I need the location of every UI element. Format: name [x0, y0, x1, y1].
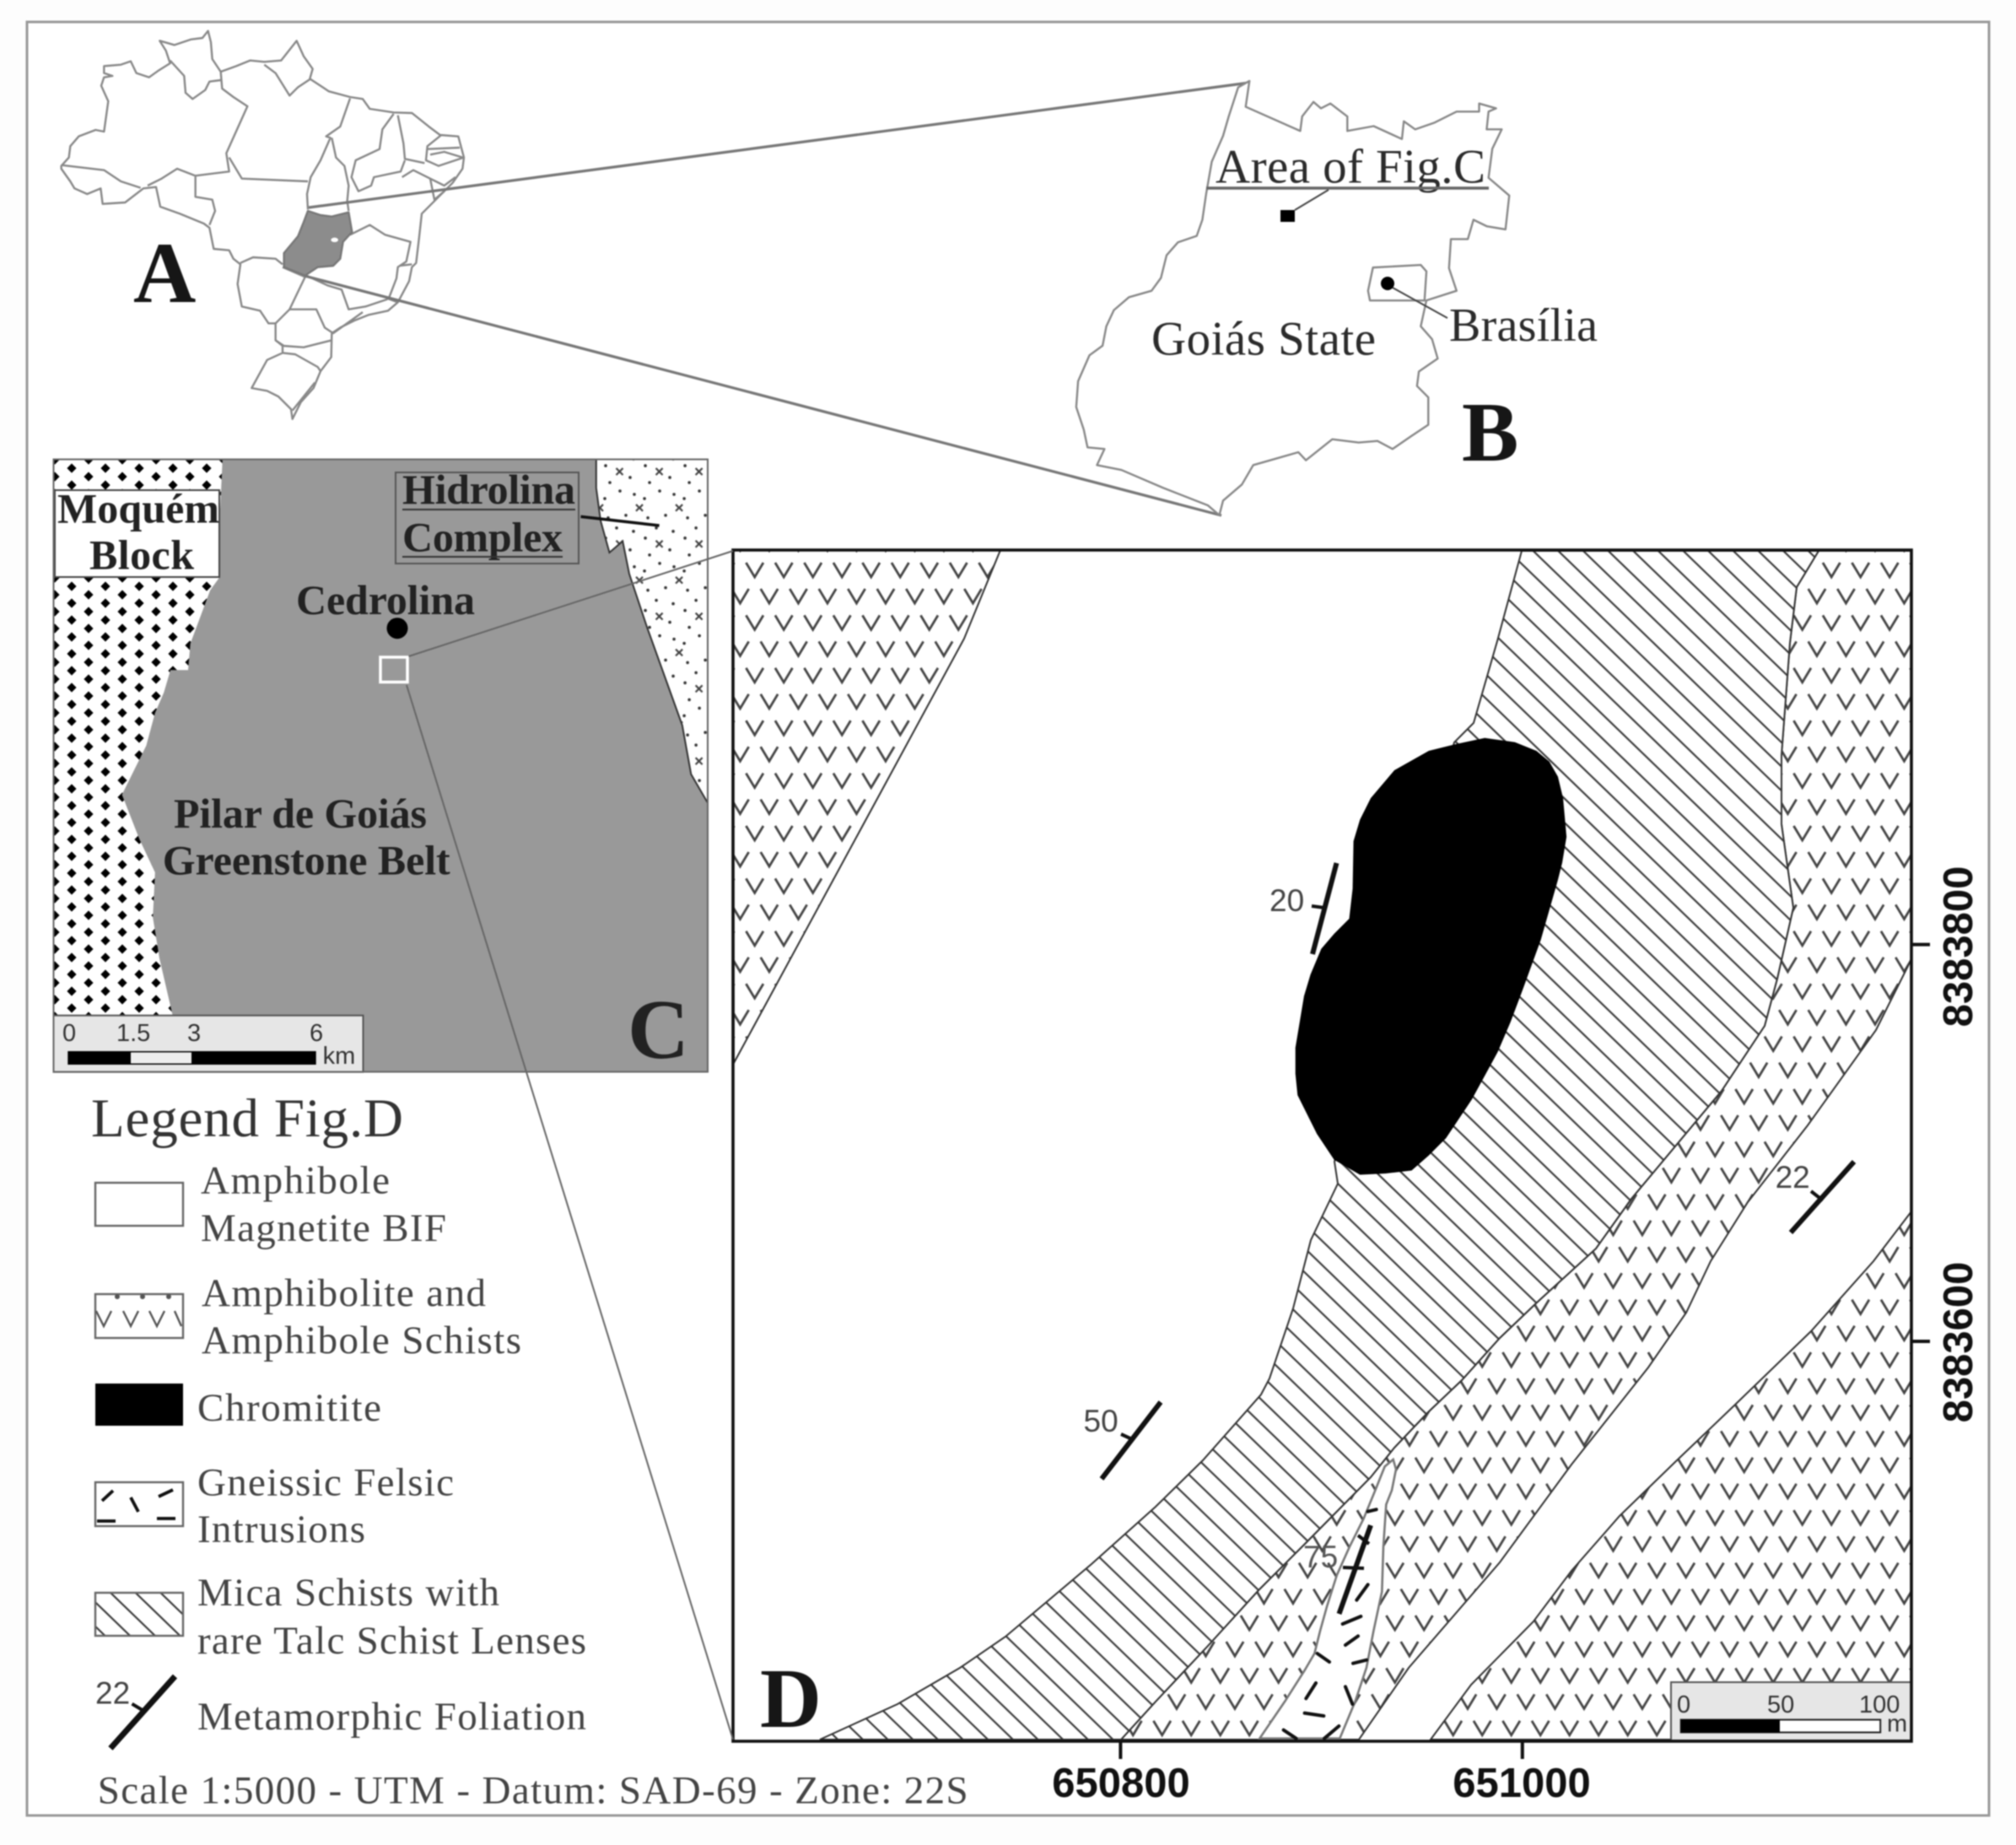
Brasília label: Brasília [1449, 299, 1598, 352]
chromitite body [1296, 738, 1566, 1175]
scale bar C [54, 1016, 363, 1072]
legend: Amphibole Magnetite BIF: Magnetite BIF [201, 1206, 446, 1250]
legend: Amphibolite and Amphibole Schists [95, 1271, 521, 1362]
label B: B [1462, 385, 1518, 479]
legend title: Legend Fig.D [91, 1088, 403, 1149]
scale bar C: 3 [187, 1020, 201, 1047]
foliation 22 [1776, 1160, 1854, 1233]
legend: Amphibolite and Amphibole Schists: Amphibole Schists [202, 1319, 521, 1362]
amphibolite lower right [1431, 1211, 1911, 1740]
Pilar de Goiás label: Pilar de Goiás [174, 790, 427, 837]
panel C: regional geology [54, 459, 708, 1076]
panel A: map of Brazil [62, 31, 464, 419]
Hidrolina leader [580, 516, 660, 526]
felsic dashes [1284, 1509, 1377, 1739]
scale and datum note: Scale 1:5000 - UTM - Datum: SAD-69 - Zone: 22S [98, 1768, 968, 1812]
Brazil outline [62, 31, 464, 419]
zoom lines A to B [305, 83, 1249, 515]
foliation 75: 75 [1303, 1540, 1338, 1574]
legend: Chromitite [95, 1384, 381, 1430]
scale bar D: 0 [1677, 1691, 1690, 1718]
Moquém Block terrain [54, 459, 223, 1016]
legend: Chromitite: Chromitite [197, 1386, 381, 1430]
state borders [62, 61, 464, 411]
Hidrolina Complex label [396, 466, 579, 564]
Greenstone Belt label: Greenstone Belt [163, 837, 450, 884]
foliation 50 [1083, 1402, 1161, 1479]
scale bar C: 6 [310, 1020, 323, 1047]
Goiás State label: Goiás State [1151, 312, 1376, 366]
Moquém Block label: Block [89, 531, 194, 578]
Hidrolina Complex label: Complex [402, 514, 563, 561]
legend: Mica Schists with rare Talc Schist Lenses: Mica Schists with [197, 1571, 499, 1615]
Hidrolina Complex label: Hidrolina [402, 466, 575, 513]
scale bar C: 1.5 [116, 1020, 150, 1047]
zoom lines C to D [407, 551, 733, 1740]
state outline and Federal District [1076, 81, 1509, 515]
Area of Fig.C label: Area of Fig.C [1216, 140, 1485, 194]
axis label 651000: 651000 [1453, 1761, 1591, 1806]
panel D: detailed geological map [733, 550, 1911, 1745]
amphibolite central band [1121, 551, 1911, 1740]
axis label 8383600: 8383600 [1936, 1262, 1981, 1422]
mica schist band [820, 551, 1819, 1740]
Moquém Block label: Moquém [57, 485, 219, 532]
legend: Amphibole Magnetite BIF: Amphibole [201, 1159, 390, 1203]
legend: Gneissic Felsic Intrusions: Gneissic Felsic [197, 1461, 454, 1505]
Federal District [331, 238, 338, 242]
label A: A [133, 225, 196, 321]
scale bar D: 50 [1767, 1691, 1794, 1718]
Cedrolina point [386, 618, 408, 639]
legend: Gneissic Felsic Intrusions: Intrusions [197, 1508, 365, 1551]
foliation 75 [1303, 1525, 1371, 1614]
area underline [1206, 186, 1489, 190]
Cedrolina label: Cedrolina [296, 576, 475, 623]
legend: Mica Schists with rare Talc Schist Lenses [95, 1571, 586, 1663]
foliation 22: 22 [1776, 1160, 1810, 1195]
axis tick marks [1120, 945, 1930, 1759]
legend [91, 1088, 586, 1748]
gneissic felsic intrusion lens [1259, 1459, 1396, 1739]
scale bar C: km [323, 1043, 355, 1070]
Hidrolina Complex terrain [596, 459, 708, 803]
legend: Metamorphic Foliation: 22 [95, 1676, 130, 1711]
foliation 50: 50 [1083, 1404, 1119, 1438]
axis label 8383800: 8383800 [1936, 866, 1981, 1027]
Goiás highlighted [284, 211, 352, 276]
legend: Amphibolite and Amphibole Schists: Amphibolite and [202, 1271, 486, 1315]
foliation 20: 20 [1269, 883, 1304, 918]
legend: Amphibole Magnetite BIF [95, 1159, 446, 1250]
scale bar D [1671, 1682, 1911, 1740]
Brasília marker [1381, 277, 1447, 318]
legend: Mica Schists with rare Talc Schist Lenses: rare Talc Schist Lenses [197, 1619, 586, 1663]
label D: D [760, 1651, 822, 1745]
foliation 20 [1269, 863, 1336, 954]
axis label 650800: 650800 [1052, 1761, 1190, 1806]
Moquém Block label [55, 485, 219, 578]
legend: Metamorphic Foliation: Metamorphic Foliation [197, 1695, 586, 1739]
legend: Gneissic Felsic Intrusions [95, 1461, 454, 1551]
amphibolite upper left [733, 550, 1000, 1063]
scale bar C: 0 [62, 1020, 76, 1047]
legend: Metamorphic Foliation [95, 1676, 586, 1748]
label C: C [628, 982, 689, 1076]
scale bar D: m [1887, 1711, 1907, 1738]
scale bar D: 100 [1859, 1691, 1900, 1718]
study area square [380, 657, 407, 682]
panel B: Goiás State map [1076, 81, 1598, 515]
Area of Fig.C marker [1280, 190, 1329, 222]
